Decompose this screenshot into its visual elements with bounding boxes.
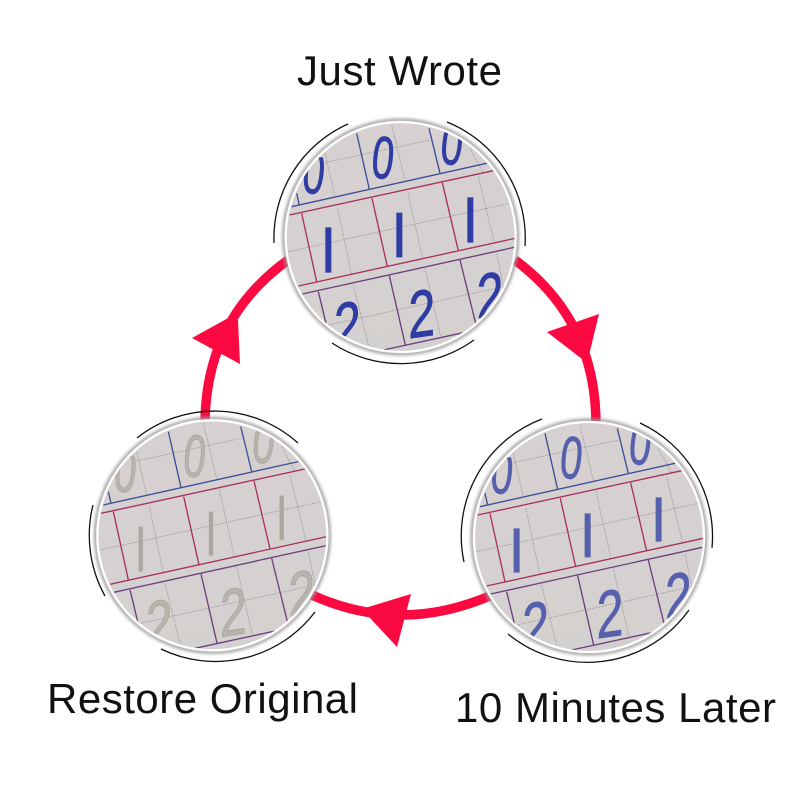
photo: colourless embossed grooves on grid paper: 2 <box>146 586 172 664</box>
photo: dark blue writing on grid paper <box>280 109 523 365</box>
photo: faded blue writing on grid paper: 0 <box>557 423 586 492</box>
photo: colourless embossed grooves on grid paper: 0 <box>249 407 278 477</box>
photo: dark blue writing on grid paper: 2 <box>477 258 503 336</box>
photo: colourless embossed grooves on grid paper <box>92 407 335 664</box>
photo: colourless embossed grooves on grid paper: 2 <box>288 556 315 634</box>
photo: faded blue writing on grid paper <box>468 409 712 665</box>
photo: faded blue writing on grid paper: 2 <box>597 575 623 653</box>
photo: dark blue writing on grid paper: 2 <box>408 275 435 353</box>
arrow: just wrote to 10 minutes later <box>515 260 599 425</box>
arrow: restore original to just wrote <box>192 260 288 425</box>
panel: just wrote magnified photo <box>274 109 525 365</box>
photo: faded blue writing on grid paper: 2 <box>665 558 692 636</box>
photo: faded blue writing on grid paper: 0 <box>626 409 655 478</box>
cycle arrows <box>192 260 599 647</box>
photo: colourless embossed grooves on grid paper: 0 <box>111 436 140 506</box>
photo: dark blue writing on grid paper: 0 <box>299 138 328 207</box>
heading: Restore Original: Restore Original <box>47 675 358 722</box>
decorative arcs: right circle <box>461 419 713 662</box>
photo: colourless embossed grooves on grid paper: 0 <box>180 421 209 491</box>
photo: faded blue writing on grid paper: 2 <box>522 587 549 665</box>
photo: dark blue writing on grid paper: 0 <box>369 123 398 192</box>
arrow: 10 minutes later to restore original <box>312 594 492 647</box>
decorative arcs: left circle <box>89 411 315 661</box>
panel: restore original magnified photo <box>89 407 335 664</box>
photo: faded blue writing on grid paper: 0 <box>488 438 517 507</box>
photo: colourless embossed grooves on grid paper: 2 <box>220 574 247 652</box>
heading: Just Wrote: Just Wrote <box>297 47 502 94</box>
heading: 10 Minutes Later: 10 Minutes Later <box>455 684 776 731</box>
decorative arcs: top circle <box>274 122 525 364</box>
panel: 10 minutes later magnified photo <box>461 409 713 665</box>
photo: dark blue writing on grid paper: 2 <box>334 287 361 365</box>
photo: dark blue writing on grid paper: 0 <box>438 109 467 178</box>
